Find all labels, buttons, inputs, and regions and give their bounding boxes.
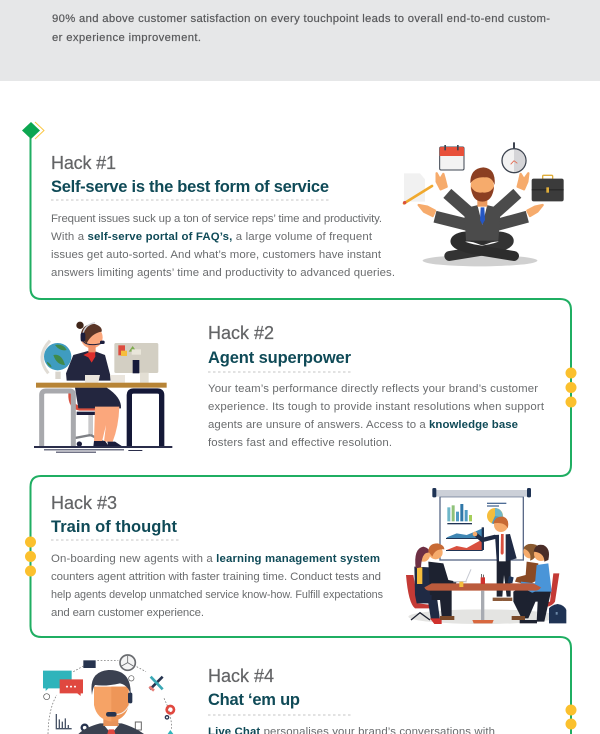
body: hack 1 — [51, 213, 395, 279]
connector dots: right 2 — [566, 704, 576, 730]
right attendees — [540, 573, 559, 607]
illustration: multitasking man — [419, 167, 543, 266]
connector dots: left — [25, 536, 36, 576]
illustration: team meeting — [406, 488, 566, 624]
tools — [150, 677, 163, 689]
title: hack 4: Chat ‘em up — [208, 691, 300, 709]
panel: hack 1 text — [51, 153, 395, 279]
body: hack 3: counters agent attrition with faster training time. Conduct tests and — [51, 571, 381, 583]
panel: hack 4 text — [208, 666, 495, 734]
body: hack 3 — [51, 553, 384, 619]
arms — [447, 193, 470, 213]
dashed orbit — [48, 661, 172, 734]
top banner — [0, 0, 600, 81]
envelope — [83, 660, 96, 668]
screen bar chart — [447, 504, 472, 524]
icon: start diamond marker — [22, 122, 44, 139]
legs — [449, 237, 509, 256]
body: hack 3: and earn customer experience. — [51, 607, 204, 619]
top banner: er experience improvement. — [52, 32, 201, 44]
illustration: agent at desk — [34, 322, 172, 453]
body: hack 1: Frequent issues suck up a ton of service reps’ time and productivity. — [51, 213, 382, 225]
title: hack 2: Agent superpower — [208, 349, 352, 367]
body: hack 3: help agents develop unmatched service know-how. Fulfill expectations — [51, 589, 384, 601]
body: hack 1: answers limiting agents’ time and productivity to advanced queries. — [51, 267, 395, 279]
presenter — [497, 560, 511, 597]
icon: paper and pencil — [403, 173, 432, 204]
icon: calendar — [440, 145, 464, 170]
top banner: 90% and above customer satisfaction on every touchpoint leads to overall end-to-end custom- — [52, 13, 550, 25]
connector dots: right 1 — [566, 368, 576, 408]
hands — [419, 173, 543, 216]
table items — [466, 569, 471, 582]
clock — [120, 655, 135, 670]
heading: hack 1: Hack #1 — [51, 153, 116, 173]
chat bubbles — [43, 671, 72, 691]
illustration: support agent with icons — [43, 655, 174, 734]
small bar chart — [56, 714, 72, 729]
small icons — [129, 676, 134, 681]
body: hack 2: experience. Its tough to provide instant resolutions when support — [208, 401, 545, 413]
projector screen — [440, 497, 523, 560]
panel: hack 3 text — [51, 493, 384, 619]
icon: briefcase — [532, 175, 564, 201]
gears — [167, 706, 174, 713]
body: hack 2: agents are unsure of answers. Access to a knowledge base — [208, 419, 518, 431]
torso — [464, 204, 501, 241]
head — [477, 195, 487, 207]
heading: hack 2: Hack #2 — [208, 323, 274, 343]
title: hack 3: Train of thought — [51, 518, 178, 536]
screen area charts — [446, 527, 484, 551]
green timeline path — [30, 130, 571, 734]
panel: hack 2 text — [208, 323, 545, 449]
agent — [66, 350, 112, 381]
bag — [549, 604, 566, 623]
heading: hack 4: Hack #4 — [208, 666, 274, 686]
body: hack 3: On-boarding new agents with a learning management system — [51, 553, 380, 565]
body: hack 2 — [208, 383, 545, 449]
agent body — [78, 723, 144, 734]
chair — [71, 393, 95, 408]
globe — [42, 341, 50, 373]
table — [424, 583, 541, 591]
monitor — [114, 343, 158, 373]
heading: hack 3: Hack #3 — [51, 493, 117, 513]
document — [135, 722, 141, 730]
title: hack 1: Self-serve is the best form of service — [51, 178, 329, 196]
body: hack 2: Your team’s performance directly reflects your brand’s customer — [208, 383, 538, 395]
body: hack 1: issues get auto-sorted. And what’s more, customers have instant — [51, 249, 382, 261]
screen pie chart — [487, 503, 506, 524]
body: hack 2: fosters fast and effective resolution. — [208, 437, 392, 449]
body: hack 1: With a self-serve portal of FAQ’s, a large volume of frequent — [51, 231, 373, 243]
icon: stopwatch — [502, 142, 526, 173]
agent head — [103, 713, 118, 726]
desk — [36, 383, 167, 388]
left attendees — [406, 575, 432, 608]
